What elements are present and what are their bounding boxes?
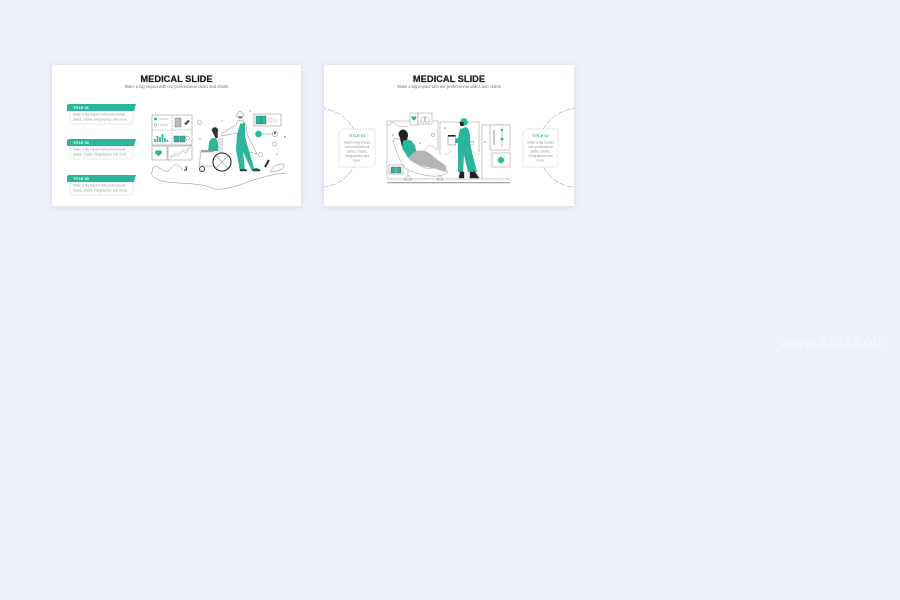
first aid card — [389, 165, 403, 174]
dentist figure — [448, 118, 479, 178]
list item two: TITLE 02 — [73, 141, 89, 145]
panel: slide two — [322, 64, 576, 208]
list item three: Make a big impact with professional — [73, 184, 125, 188]
callout: title 02: Make a big impact — [527, 140, 554, 144]
list item one — [67, 104, 136, 124]
infographic canvas — [50, 64, 576, 208]
list item three — [67, 175, 136, 195]
slide two subheading: Make a big impact with our professional slides and charts — [397, 84, 501, 89]
callout: title 01: TITLE 01 — [349, 133, 366, 138]
floating nodes — [198, 110, 286, 156]
slide one heading: MEDICAL SLIDE — [140, 74, 213, 84]
floor lines — [387, 179, 510, 183]
callout: title 02: with professional — [528, 145, 553, 149]
dashed arcs — [324, 108, 574, 188]
slide two heading: MEDICAL SLIDE — [413, 74, 485, 84]
wheelchair patient — [199, 127, 231, 172]
illustration: wheelchair scene — [151, 110, 286, 189]
callout: title 02: infographics and — [528, 154, 553, 158]
panel: slide one — [52, 65, 301, 206]
monitor and virus cards — [490, 125, 510, 167]
list item one: Make a big impact with professional — [73, 112, 125, 116]
callout: title 02: TITLE 02 — [532, 133, 550, 138]
list item two: Make a big impact with professional — [73, 148, 125, 152]
list item one: slides, charts, infographics and more. — [73, 118, 128, 122]
callout: title 01: Make a big impact — [344, 140, 370, 144]
list item two: slides, charts, infographics and more. — [73, 152, 128, 156]
callout: title 01: infographics and — [345, 154, 369, 158]
slide one subheading: Make a big impact with our professional slides and charts — [125, 84, 228, 89]
callout: title 01 — [339, 129, 375, 167]
callout: title 02: more. — [536, 158, 545, 162]
callout: title 02 — [523, 129, 558, 167]
callout: title 01: with professional — [345, 145, 370, 149]
watermark: www.25xt.com — [778, 334, 887, 351]
callout: title 02: slides, charts, — [530, 150, 551, 154]
window frames — [387, 121, 510, 178]
heart and lungs cards — [410, 113, 432, 125]
list item three: slides, charts, infographics and more. — [73, 188, 128, 192]
illustration: dental scene — [387, 113, 510, 183]
list item one: TITLE 01 — [73, 106, 89, 110]
list item three: TITLE 03 — [73, 177, 89, 181]
callout: title 01: slides, charts, — [347, 150, 367, 154]
doctor figure — [221, 112, 260, 171]
reclining patient — [393, 130, 448, 180]
ground blob with plants — [151, 160, 285, 189]
callout: title 01: more. — [353, 158, 361, 162]
list item two — [67, 139, 136, 159]
dashboard panels — [152, 115, 192, 160]
